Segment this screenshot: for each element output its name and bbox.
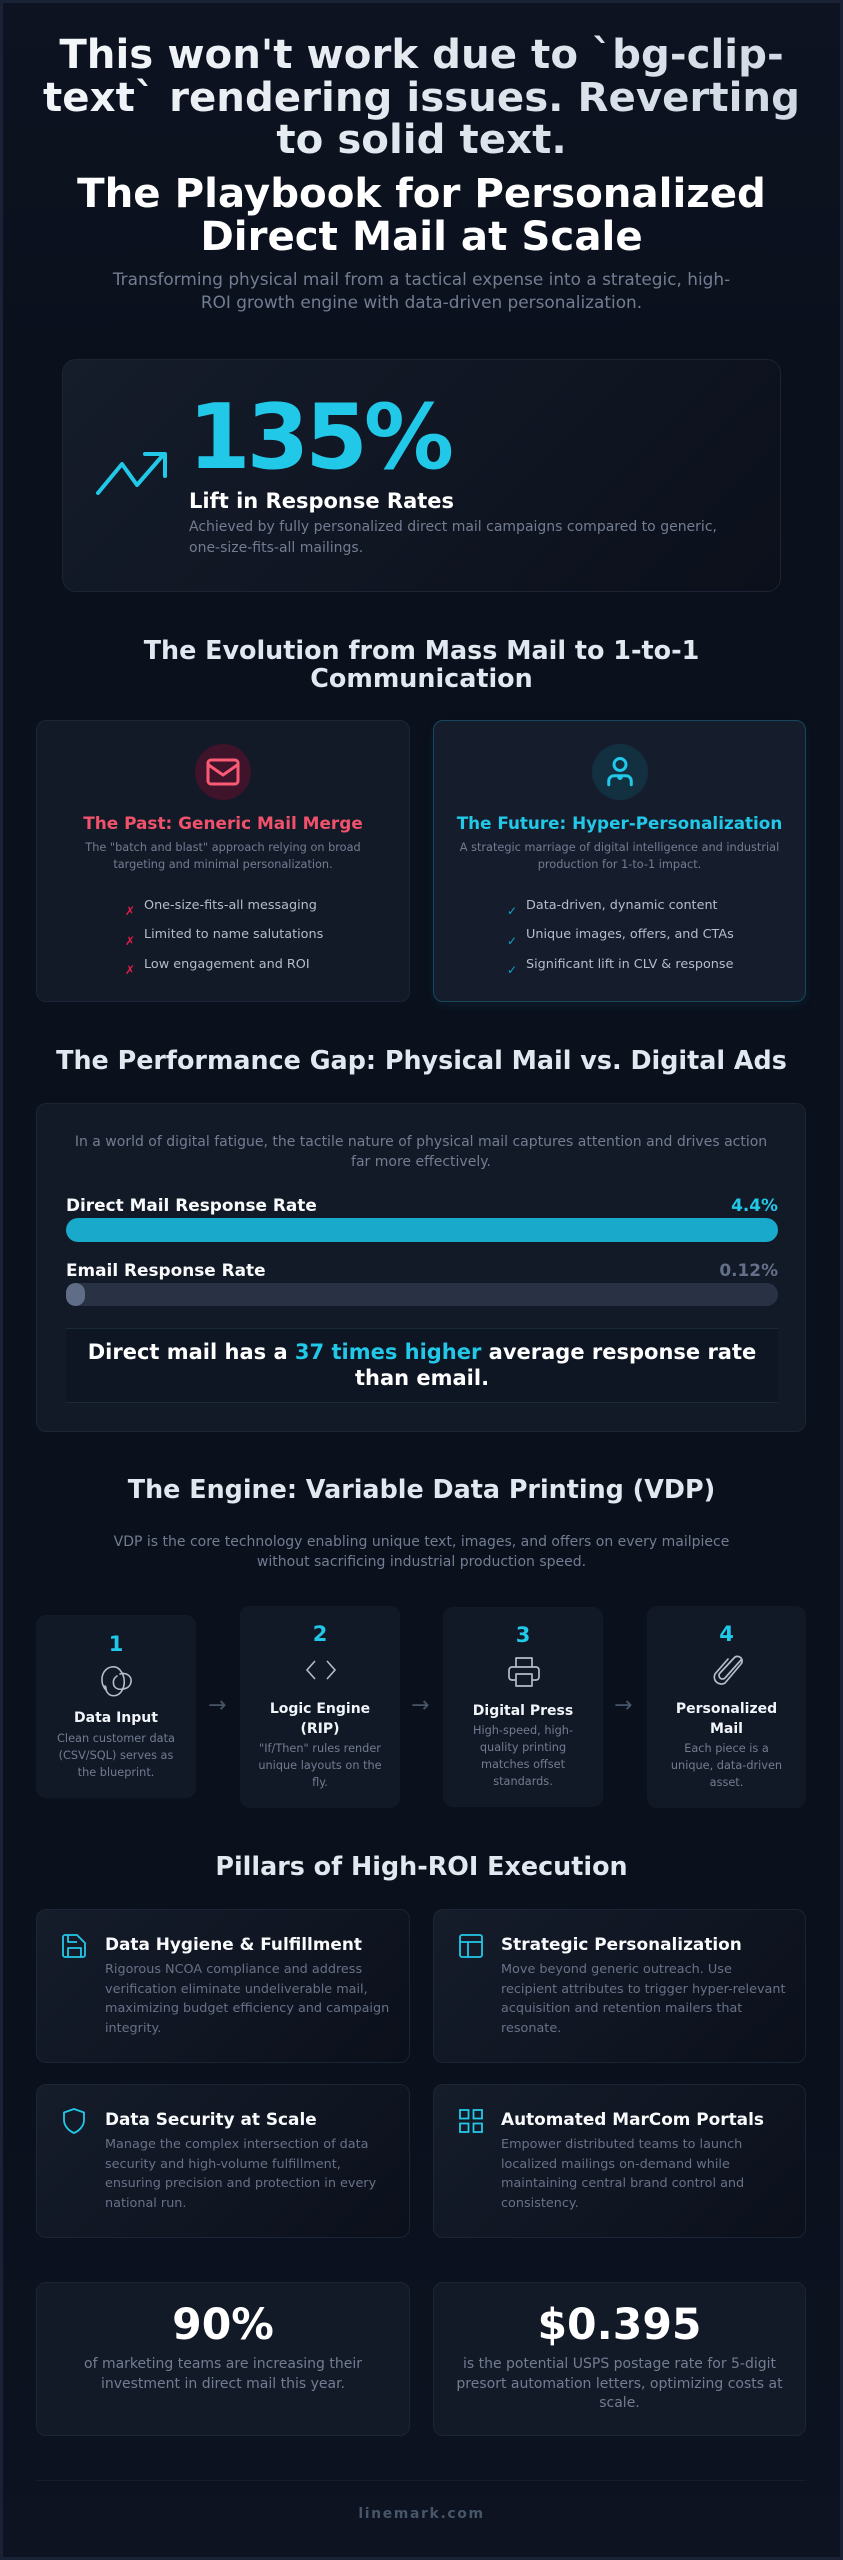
- arrow: →: [411, 1693, 429, 1718]
- future description: production for 1-to-1 impact.: [538, 858, 701, 871]
- past list: ✗: [125, 904, 135, 918]
- pillar text: consistency.: [501, 2196, 579, 2211]
- stat: postage: [433, 2282, 806, 2436]
- main title: Direct Mail at Scale: [200, 213, 643, 260]
- gradient title: This won't work due to `bg-clip-: [59, 31, 784, 78]
- subtitle: [112, 269, 730, 312]
- panel: hero stat: [62, 359, 781, 592]
- past description: targeting and minimal personalization.: [113, 858, 333, 871]
- panel intro: far more effectively.: [351, 1154, 491, 1170]
- direct mail value: 4.4%: [731, 1195, 778, 1215]
- step description: unique, data-driven: [671, 1759, 782, 1772]
- stat text: [456, 2356, 783, 2411]
- pillar title: Data Security at Scale: [105, 2109, 317, 2129]
- pillar text: recipient attributes to trigger hyper-relevant: [501, 1982, 786, 1997]
- panel intro: [75, 1134, 767, 1170]
- step description: Each piece is a: [684, 1742, 769, 1755]
- pillar title: Strategic Personalization: [501, 1934, 742, 1954]
- past list: Limited to name salutations: [144, 927, 323, 942]
- step 3: digital press: [443, 1607, 603, 1807]
- future list: ✓: [507, 904, 517, 918]
- step title: [676, 1701, 777, 1737]
- arrow: →: [208, 1693, 226, 1718]
- icon: code: [306, 1660, 336, 1680]
- gradient title: to solid text.: [276, 116, 567, 163]
- subtitle: Transforming physical mail from a tactical expense into a strategic, high-: [113, 269, 730, 289]
- pillar text: acquisition and retention mailers that: [501, 2001, 742, 2016]
- main title: The Playbook for Personalized: [77, 170, 766, 217]
- icon: shield: [63, 2108, 85, 2134]
- panel intro: In a world of digital fatigue, the tactile nature of physical mail captures attention and drives action: [75, 1134, 767, 1150]
- panel: the past: [36, 720, 410, 1002]
- heading: evolution: Communication: [310, 663, 533, 693]
- stat number: 90%: [172, 2301, 274, 2350]
- step description: [473, 1724, 573, 1788]
- step description: the blueprint.: [78, 1766, 154, 1779]
- pillar text: [501, 1962, 786, 2036]
- step number: 2: [313, 1622, 327, 1646]
- pillar text: [105, 2137, 376, 2211]
- pillar text: Manage the complex intersection of data: [105, 2137, 368, 2152]
- stat label: Lift in Response Rates: [189, 489, 454, 513]
- pillar: data hygiene: [36, 1909, 410, 2063]
- gradient title: [0, 34, 843, 162]
- panel: performance gap: [36, 1103, 806, 1432]
- step number: 4: [719, 1622, 734, 1646]
- pillar text: localized mailings on-demand while: [501, 2157, 730, 2172]
- future description: [460, 841, 779, 871]
- pillar: marcom portals: [433, 2084, 806, 2238]
- stat text: scale.: [599, 2395, 640, 2411]
- panel: the future: [433, 720, 806, 1002]
- step description: quality printing: [480, 1741, 566, 1754]
- step description: [671, 1742, 782, 1789]
- gradient title: text` rendering issues. Reverting: [43, 74, 800, 120]
- stat number: $0.395: [537, 2301, 702, 2350]
- icon: save: [62, 1934, 86, 1958]
- future list: Unique images, offers, and CTAs: [526, 927, 734, 942]
- pillar title: Automated MarCom Portals: [501, 2109, 764, 2129]
- past heading: The Past: Generic Mail Merge: [83, 813, 363, 833]
- step title: Logic Engine: [270, 1701, 370, 1717]
- pillar text: maintaining central brand control and: [501, 2176, 744, 2191]
- step title: Mail: [710, 1721, 743, 1737]
- icon: user: [592, 744, 648, 800]
- pillar text: integrity.: [105, 2021, 161, 2036]
- footer: brand: linemark.com: [358, 2506, 485, 2522]
- heading: pillars: Pillars of High-ROI Execution: [215, 1851, 628, 1881]
- direct mail label: Direct Mail Response Rate: [66, 1195, 317, 1215]
- step description: "If/Then" rules render: [259, 1742, 381, 1755]
- arrow: →: [614, 1693, 632, 1718]
- bar: email: [66, 1260, 778, 1306]
- step title: Digital Press: [473, 1703, 573, 1719]
- stat description: [189, 519, 717, 556]
- icon: printer: [508, 1657, 540, 1687]
- past description: The "batch and blast" approach relying on broad: [85, 841, 361, 854]
- pillar text: [105, 1962, 389, 2036]
- stat description: one-size-fits-all mailings.: [189, 540, 363, 556]
- pillar: data security: [36, 2084, 410, 2238]
- stat: 90 percent: [36, 2282, 410, 2436]
- step description: matches offset: [481, 1758, 565, 1771]
- heading: evolution: [144, 635, 699, 693]
- past description: [85, 841, 361, 871]
- stat text: investment in direct mail this year.: [101, 2376, 345, 2392]
- icon: data: [101, 1666, 132, 1696]
- stat text: is the potential USPS postage rate for 5-digit: [463, 2356, 776, 2372]
- step title: [270, 1701, 370, 1737]
- icon: trending up arrow: [96, 452, 167, 496]
- pillar text: Move beyond generic outreach. Use: [501, 1962, 732, 1977]
- pillar text: Empower distributed teams to launch: [501, 2137, 742, 2152]
- past list: Low engagement and ROI: [144, 957, 310, 972]
- past list: ✗: [125, 934, 135, 948]
- step 1: data input: [36, 1615, 196, 1798]
- pillar text: Rigorous NCOA compliance and address: [105, 1962, 362, 1977]
- step description: [258, 1742, 382, 1789]
- icon: paperclip: [714, 1656, 743, 1685]
- step number: 1: [109, 1632, 123, 1656]
- main title: [77, 170, 766, 260]
- stat description: Achieved by fully personalized direct mail campaigns compared to generic,: [189, 519, 717, 535]
- step title: Data Input: [74, 1710, 158, 1726]
- step description: (CSV/SQL) serves as: [59, 1749, 173, 1762]
- future description: A strategic marriage of digital intelligence and industrial: [460, 841, 779, 854]
- step description: fly.: [312, 1776, 328, 1789]
- pillar text: national run.: [105, 2196, 186, 2211]
- email label: Email Response Rate: [66, 1260, 266, 1280]
- step description: asset.: [710, 1776, 743, 1789]
- step 2: logic engine: [240, 1606, 400, 1808]
- stat text: [84, 2356, 362, 2392]
- engine intro: without sacrificing industrial production speed.: [257, 1554, 586, 1570]
- email value: 0.12%: [719, 1260, 778, 1280]
- pillar text: ensuring precision and protection in every: [105, 2176, 376, 2191]
- callout: Direct mail has a 37 times higher average response rate: [88, 1340, 756, 1364]
- engine intro: [114, 1534, 729, 1570]
- pillar text: resonate.: [501, 2021, 561, 2036]
- big number: 135%: [188, 385, 450, 490]
- pillar text: security and high-volume fulfillment,: [105, 2157, 341, 2172]
- heading: the engine: The Engine: Variable Data Printing (VDP): [128, 1474, 715, 1504]
- pillar: strategic personalization: [433, 1909, 806, 2063]
- heading: performance gap: The Performance Gap: Physical Mail vs. Digital Ads: [56, 1045, 787, 1075]
- future list: ✓: [507, 963, 517, 977]
- pillar title: Data Hygiene & Fulfillment: [105, 1934, 362, 1954]
- step description: [57, 1732, 175, 1779]
- step title: (RIP): [300, 1721, 340, 1737]
- past list: [125, 898, 323, 977]
- stat text: of marketing teams are increasing their: [84, 2356, 362, 2372]
- future list: Significant lift in CLV & response: [526, 957, 733, 972]
- step description: High-speed, high-: [473, 1724, 573, 1737]
- subtitle: ROI growth engine with data-driven personalization.: [201, 292, 642, 312]
- step number: 3: [516, 1623, 530, 1647]
- icon: mail: [195, 744, 251, 800]
- pillar text: [501, 2137, 744, 2211]
- callout: [66, 1328, 778, 1403]
- pillar text: maximizing budget efficiency and campaign: [105, 2001, 389, 2016]
- step description: Clean customer data: [57, 1732, 175, 1745]
- future list: [507, 898, 734, 977]
- future heading: The Future: Hyper-Personalization: [457, 813, 782, 833]
- step description: standards.: [493, 1775, 553, 1788]
- direct mail track: [66, 1218, 778, 1242]
- bar: direct mail: [66, 1195, 778, 1242]
- step 4: personalized mail: [647, 1606, 806, 1808]
- future list: ✓: [507, 934, 517, 948]
- future list: Data-driven, dynamic content: [526, 898, 718, 913]
- header: [43, 31, 800, 312]
- past list: ✗: [125, 963, 135, 977]
- stat text: presort automation letters, optimizing costs at: [456, 2376, 783, 2392]
- heading: evolution: The Evolution from Mass Mail to 1-to-1: [144, 635, 699, 665]
- engine intro: VDP is the core technology enabling unique text, images, and offers on every mailpiece: [114, 1534, 729, 1550]
- step title: Personalized: [676, 1701, 777, 1717]
- icon: layout: [459, 1934, 483, 1958]
- callout: than email.: [355, 1366, 489, 1390]
- pillar text: verification eliminate undeliverable mail,: [105, 1982, 368, 1997]
- past list: One-size-fits-all messaging: [144, 898, 317, 913]
- step description: unique layouts on the: [258, 1759, 382, 1772]
- icon: grid: [459, 2109, 483, 2133]
- email track: [66, 1283, 778, 1306]
